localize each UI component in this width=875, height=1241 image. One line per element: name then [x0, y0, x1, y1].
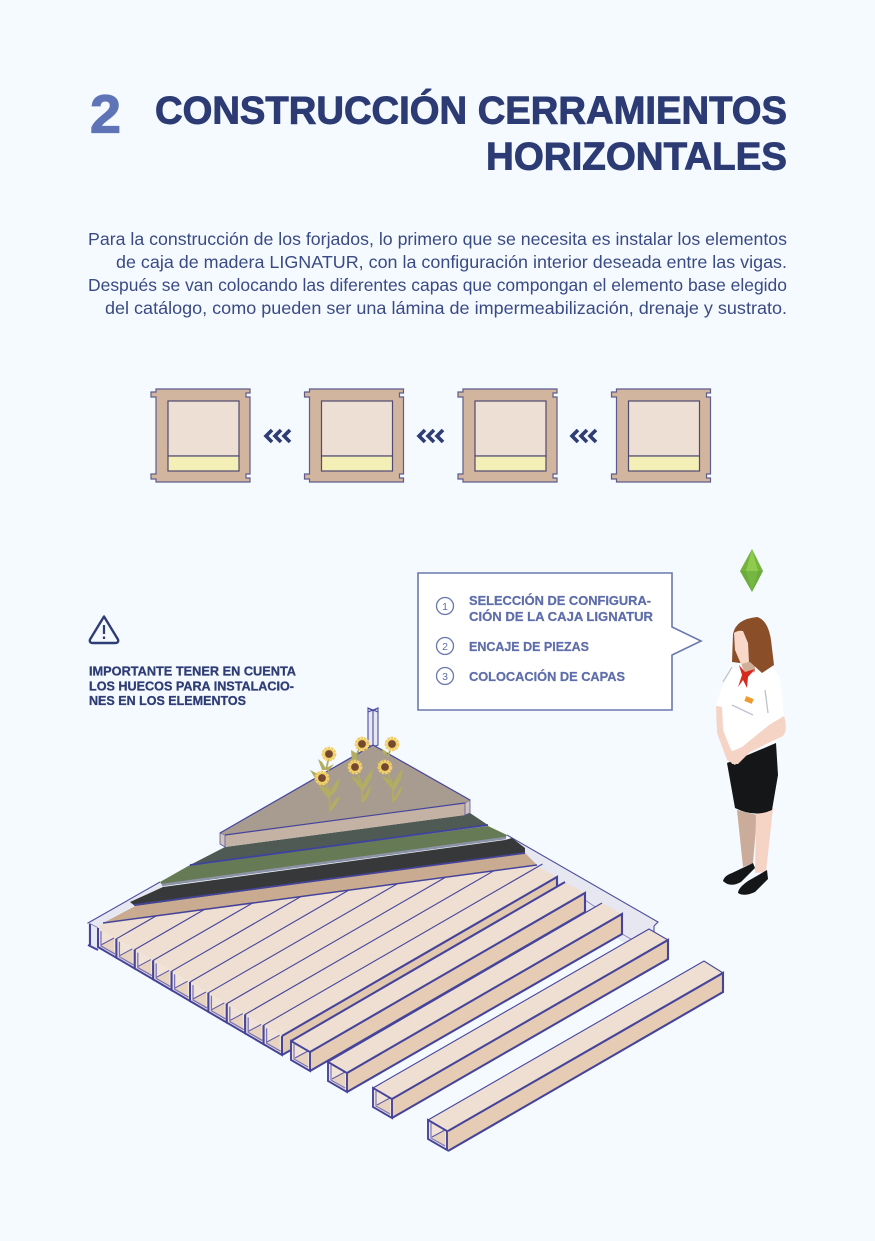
left rail: [88, 882, 166, 950]
callout: steps: ENCAJE DE PIEZAS: [469, 639, 589, 654]
beam 4: [428, 961, 723, 1151]
sunflowers: [310, 739, 403, 812]
layer: green drainage: [160, 826, 507, 886]
intro paragraph: [88, 229, 787, 318]
warning note: LOS HUECOS PARA INSTALACIO-: [89, 678, 294, 694]
layer: black waterproofing sheet: [130, 838, 525, 906]
title: HORIZONTALES: [486, 136, 787, 178]
intro paragraph: Para la construcción de los forjados, lo primero que se necesita es instalar los elementos: [88, 229, 787, 249]
shoes: [723, 863, 768, 895]
rear rail: [507, 835, 658, 948]
warning note: [89, 664, 297, 708]
back leg: [737, 810, 757, 867]
slab front cells: [98, 928, 282, 1055]
beam 1: [291, 882, 585, 1071]
shirt folds: [723, 667, 768, 715]
callout: steps: 2: [442, 641, 448, 653]
cross-section sequence with arrows: [151, 389, 710, 482]
intro paragraph: del catálogo, como pueden ser una lámina de impermeabilización, drenaje y sustrato.: [105, 298, 787, 318]
hair: [732, 617, 774, 673]
callout: steps: 3: [442, 671, 448, 683]
front leg: [755, 808, 773, 873]
callout: steps: COLOCACIÓN DE CAPAS: [469, 669, 625, 684]
callout: steps: SELECCIÓN DE CONFIGURA-: [469, 593, 651, 608]
callout: steps: [418, 573, 701, 710]
section number: 2: [90, 85, 121, 145]
illustration: woman: [716, 617, 786, 895]
intro paragraph: de caja de madera LIGNATUR, con la configuración interior deseada entre las vigas.: [116, 252, 787, 272]
shirt: [716, 665, 784, 752]
beam 2: [328, 903, 622, 1092]
warning note: NES EN LOS ELEMENTOS: [89, 693, 246, 708]
right arm: [728, 716, 786, 764]
intro paragraph: Después se van colocando las diferentes capas que compongan el elemento base elegido: [88, 275, 787, 295]
title: [155, 88, 787, 178]
layer: tan panel: [103, 853, 537, 923]
slab top with joints: [98, 864, 557, 1055]
icon: warning triangle: [90, 616, 118, 643]
left arm: [716, 706, 741, 765]
name badge: [744, 696, 754, 704]
layer: dark grey filter: [190, 813, 488, 865]
callout: steps: 1: [442, 601, 448, 613]
neck: [741, 661, 755, 674]
skirt: [727, 743, 778, 814]
illustration: floor construction: [88, 708, 723, 1151]
title: CONSTRUCCIÓN CERRAMIENTOS: [155, 88, 787, 132]
vertical post: [368, 708, 378, 747]
face: [734, 631, 749, 664]
warning note: IMPORTANTE TENER EN CUENTA: [89, 664, 297, 678]
red neckerchief: [738, 665, 755, 688]
callout: steps: CIÓN DE LA CAJA LIGNATUR: [469, 609, 654, 624]
icon: green plumbob: [740, 549, 763, 592]
layer: substrate: [220, 745, 470, 847]
beam 3: [373, 929, 668, 1118]
